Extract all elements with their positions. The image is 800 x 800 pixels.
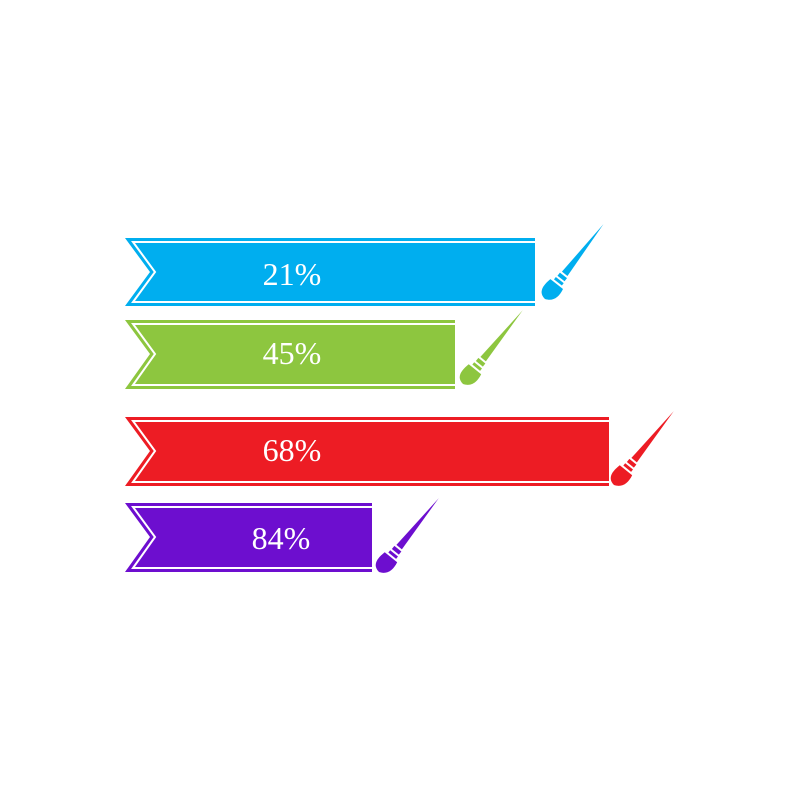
bar: 45% green <box>125 320 455 389</box>
icon: green brush <box>456 304 530 389</box>
bar: 68% red <box>125 417 609 486</box>
icon: blue brush <box>538 219 610 304</box>
icon: red brush <box>607 405 681 490</box>
bar: 21% blue <box>125 238 535 306</box>
label 45%: 45% <box>263 335 321 371</box>
label 68%: 68% <box>263 432 321 468</box>
icon: purple brush <box>372 492 446 577</box>
label 84%: 84% <box>252 520 310 556</box>
bar: 84% purple <box>125 503 372 572</box>
label 21%: 21% <box>263 256 321 292</box>
